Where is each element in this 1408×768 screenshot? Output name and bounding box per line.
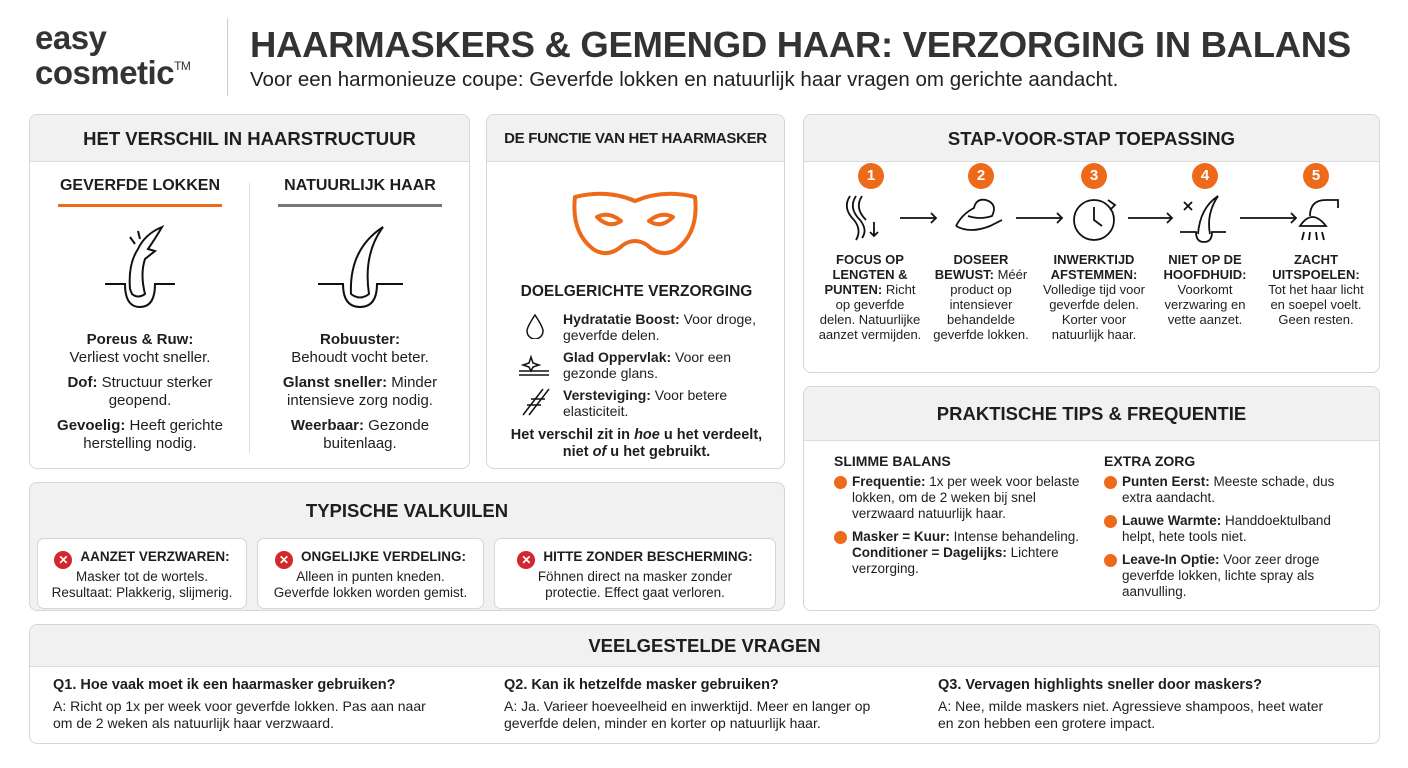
- panel: FAQ: VEELGESTELDE VRAGEN: [588, 635, 821, 656]
- text: 4: [1201, 167, 1209, 184]
- card: verdeling: Alleen in punten kneden.: [296, 569, 445, 584]
- card: aanzet: Resultaat: Plakkerig, slijmerig.: [52, 585, 232, 600]
- list: benefits: Glad Oppervlak: Voor een gezonde glans.: [563, 349, 731, 381]
- column: geverfde lokken: herstelling nodig.: [83, 435, 197, 452]
- text: ZACHT UITSPOELEN: Tot het haar licht en soepel voelt. Geen resten.: [1268, 252, 1364, 327]
- column: natuurlijk haar: NATUURLIJK HAAR: [284, 177, 436, 194]
- icon: mask: [572, 192, 698, 256]
- column: geverfde lokken: [57, 177, 223, 452]
- text: om de 2 weken als natuurlijk haar verzwaard.: [53, 715, 334, 731]
- logo: cosmeticTM: [35, 54, 190, 91]
- column: natuurlijk haar: Weerbaar: Gezonde: [291, 417, 429, 434]
- panel: stap-voor-stap: STAP-VOOR-STAP TOEPASSING: [948, 128, 1235, 149]
- column: natuurlijk haar: buitenlaag.: [323, 435, 397, 452]
- title: HAARMASKERS & GEMENGD HAAR: VERZORGING IN BALANS: [250, 24, 1351, 65]
- panel: praktische tips: Punten Eerst: Meeste schade, dus extra aandacht.: [1122, 474, 1334, 505]
- card: aanzet: [37, 538, 247, 609]
- text: en zon hebben een grotere impact.: [938, 715, 1155, 731]
- text: Q1. Hoe vaak moet ik een haarmasker gebruiken?: [53, 677, 396, 693]
- column: natuurlijk haar: intensieve zorg nodig.: [287, 392, 433, 409]
- card: aanzet: ✕: [58, 553, 68, 567]
- column: natuurlijk haar: Behoudt vocht beter.: [291, 349, 429, 366]
- card: verdeling: ✕: [279, 553, 289, 567]
- text: 5: [1312, 167, 1320, 184]
- column: natuurlijk haar: [278, 177, 442, 452]
- list: benefits: Hydratatie Boost: Voor droge, geverfde delen.: [563, 311, 756, 343]
- panel: functie haarmasker: niet of u het gebruikt.: [563, 444, 710, 460]
- card: hitte: [494, 538, 776, 609]
- column: geverfde lokken: geopend.: [109, 392, 171, 409]
- panel: haarstructuur: [29, 114, 470, 469]
- panel: praktische tips: Leave-In Optie: Voor zeer droge geverfde lokken, lichte spray als aanvulling.: [1122, 552, 1319, 599]
- panel: FAQ: [29, 624, 1380, 744]
- panel: valkuilen: [29, 482, 785, 611]
- panel: functie haarmasker: DOELGERICHTE VERZORGING: [521, 283, 752, 300]
- panel: stap-voor-stap: [803, 114, 1380, 373]
- column: geverfde lokken: Verliest vocht sneller.: [70, 349, 210, 366]
- panel: praktische tips: ✓: [828, 532, 835, 542]
- panel: functie haarmasker: [486, 114, 785, 469]
- list: benefits: Versteviging: Voor betere elasticiteit.: [563, 387, 727, 419]
- panel: praktische tips: [803, 386, 1380, 611]
- panel: praktische tips: SLIMME BALANS: [834, 453, 951, 469]
- panel: praktische tips: Masker = Kuur: Intense behandeling.: [852, 529, 1079, 544]
- logo: [35, 19, 190, 91]
- text: NIET OP DE HOOFDHUID: Voorkomt verzwaring en vette aanzet.: [1163, 252, 1247, 327]
- text: Q3. Vervagen highlights sneller door maskers?: [938, 677, 1262, 693]
- panel: praktische tips: ✓: [1098, 477, 1105, 487]
- text: A: Ja. Varieer hoeveelheid en inwerktijd. Meer en langer op: [504, 698, 870, 714]
- card: hitte: ✕: [521, 553, 531, 567]
- card: hitte: protectie. Effect gaat verloren.: [545, 585, 725, 600]
- panel: praktische tips: EXTRA ZORG: [1104, 453, 1195, 469]
- panel: praktische tips: PRAKTISCHE TIPS & FREQUENTIE: [937, 403, 1246, 424]
- text: A: Nee, milde maskers niet. Agressieve shampoos, heet water: [938, 698, 1323, 714]
- panel: praktische tips: ✓: [1098, 555, 1105, 565]
- step texts: FOCUS OP LENGTEN & PUNTEN: Richt op geverfde delen. Natuurlijke aanzet vermijden.: [819, 252, 921, 342]
- panel: praktische tips: ✓: [1098, 516, 1105, 526]
- text: A: Richt op 1x per week voor geverfde lokken. Pas aan naar: [53, 698, 426, 714]
- list: benefits: [519, 311, 756, 419]
- panel: praktische tips: Frequentie: 1x per week voor belaste lokken, om de 2 weken bij snel verzwaard natuurlijk haar.: [852, 474, 1079, 521]
- column: natuurlijk haar: Glanst sneller: Minder: [283, 374, 437, 391]
- logo: easy: [35, 19, 106, 56]
- text: geverfde delen, minder en korter op natuurlijk haar.: [504, 715, 821, 731]
- step icons and arrows: [846, 195, 1339, 243]
- panel: praktische tips: Conditioner = Dagelijks: Lichtere verzorging.: [852, 545, 1059, 576]
- text: Q2. Kan ik hetzelfde masker gebruiken?: [504, 677, 779, 693]
- column: natuurlijk haar: Robuuster:: [320, 331, 400, 348]
- panel: functie haarmasker: Het verschil zit in hoe u het verdeelt,: [511, 427, 762, 443]
- subtitle: Voor een harmonieuze coupe: Geverfde lokken en natuurlijk haar vragen om gerichte aandacht.: [250, 68, 1118, 91]
- column: geverfde lokken: GEVERFDE LOKKEN: [60, 177, 220, 194]
- panel: praktische tips: Lauwe Warmte: Handdoektulband helpt, hete tools niet.: [1122, 513, 1331, 544]
- card: hitte: HITTE ZONDER BESCHERMING:: [543, 549, 753, 564]
- icon: damaged hair: [105, 225, 175, 308]
- card: verdeling: ONGELIJKE VERDELING:: [301, 549, 466, 564]
- text: 1: [867, 167, 875, 184]
- column: geverfde lokken: Dof: Structuur sterker: [67, 374, 213, 391]
- column: geverfde lokken: Poreus & Ruw:: [87, 331, 193, 348]
- panel: haarstructuur: HET VERSCHIL IN HAARSTRUCTUUR: [83, 128, 416, 149]
- card: hitte: Föhnen direct na masker zonder: [538, 569, 732, 584]
- text: 3: [1090, 167, 1098, 184]
- card: aanzet: Masker tot de wortels.: [76, 569, 208, 584]
- panel: valkuilen: TYPISCHE VALKUILEN: [306, 500, 508, 521]
- text: DOSEER BEWUST: Méér product op intensiever behandelde geverfde lokken.: [933, 252, 1029, 342]
- text: INWERKTIJD AFSTEMMEN: Volledige tijd voor geverfde delen. Korter voor natuurlijk haar.: [1043, 252, 1145, 342]
- card: aanzet: AANZET VERZWAREN:: [80, 549, 230, 564]
- panel: functie haarmasker: DE FUNCTIE VAN HET HAARMASKER: [504, 130, 767, 147]
- panel: praktische tips: ✓: [828, 477, 835, 487]
- card: verdeling: Geverfde lokken worden gemist.: [274, 585, 467, 600]
- card: verdeling: [257, 538, 484, 609]
- column: geverfde lokken: Gevoelig: Heeft gerichte: [57, 417, 223, 434]
- icon: healthy hair: [318, 226, 403, 308]
- text: 2: [977, 167, 985, 184]
